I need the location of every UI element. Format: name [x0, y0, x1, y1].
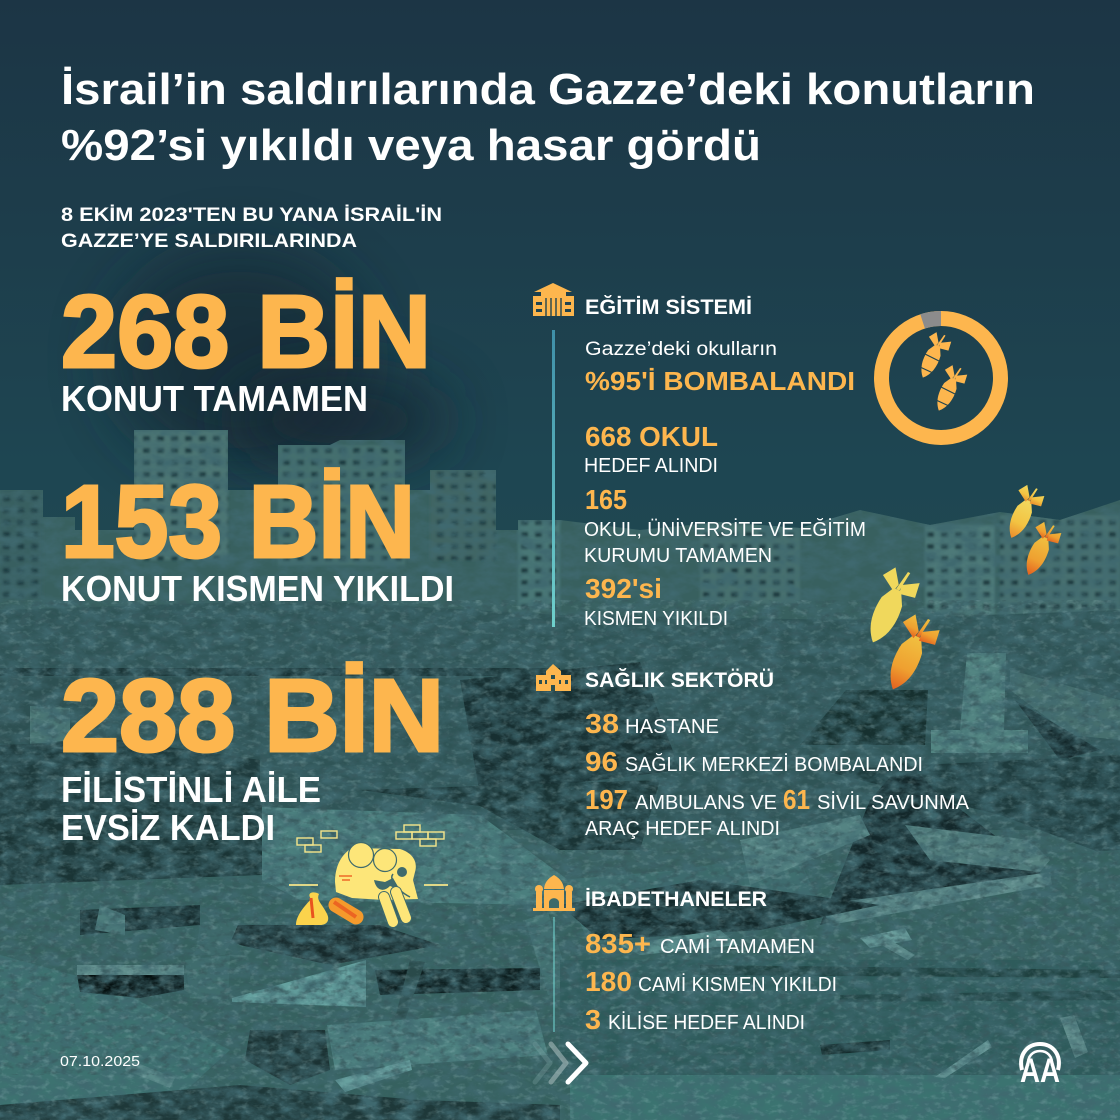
- icons: falling bombs: [855, 482, 1064, 698]
- row: 197 ambulans, 61 sivil savunma: 197: [585, 784, 628, 815]
- stat: 165: 165: [585, 484, 627, 515]
- heading: eğitim sistemi: EĞİTİM SİSTEMİ: [585, 295, 752, 319]
- icon: hospital building: [536, 664, 571, 691]
- text: kurumu tamamen: KURUMU TAMAMEN: [584, 545, 772, 567]
- left column: key figures: [61, 274, 454, 848]
- text: okul üniversite: OKUL, ÜNİVERSİTE VE EĞİTİM: [584, 518, 866, 541]
- row: 3 kilise: 3: [585, 1004, 601, 1035]
- row: 835+ cami: CAMİ TAMAMEN: [660, 935, 815, 958]
- logo: AA: [1020, 1044, 1060, 1090]
- row: 180 cami: 180: [585, 966, 632, 997]
- row: 197 ambulans, 61 sivil savunma: 61: [783, 784, 810, 815]
- subtitle: [61, 205, 442, 252]
- text: gazze'deki okulların: Gazze’deki okulların: [585, 339, 777, 360]
- logo: AA: AA: [1020, 1052, 1060, 1090]
- stat: 392'si: 392'si: [585, 573, 662, 604]
- stat: 288 bin: 288 BİN: [61, 658, 444, 773]
- row: 180 cami: CAMİ KISMEN YIKILDI: [638, 973, 837, 996]
- section: health: [536, 664, 970, 840]
- vertical rule: [552, 330, 555, 627]
- title: %92’si yıkıldı veya hasar gördü: [61, 121, 761, 170]
- ground: [0, 850, 1120, 890]
- row: 96 sağlık merkezi: SAĞLIK MERKEZİ BOMBALANDI: [625, 753, 923, 776]
- text: %95'i bombalandı: %95'İ BOMBALANDI: [585, 366, 855, 396]
- label: evsiz kaldı: EVSİZ KALDI: [61, 807, 275, 848]
- row: 835+ cami: [585, 928, 815, 959]
- row: 180 cami: [585, 966, 837, 997]
- icon: chevrons: [535, 1044, 586, 1082]
- icon: displaced family with bricks: [289, 825, 448, 925]
- section: places of worship: [533, 875, 837, 1035]
- icon: school building: [533, 283, 574, 316]
- row: 197 ambulans, 61 sivil savunma: AMBULANS VE: [635, 792, 777, 814]
- date: 07.10.2025: [60, 1054, 140, 1070]
- row: 38 hastane: HASTANE: [625, 716, 719, 738]
- subtitle: 8 EKİM 2023'TEN BU YANA İSRAİL'İN: [61, 205, 442, 226]
- label: konut kısmen yıkıldı: KONUT KISMEN YIKILDI: [61, 568, 454, 609]
- label: konut tamamen: KONUT TAMAMEN: [61, 378, 368, 419]
- row: 96 sağlık merkezi: [585, 746, 923, 777]
- row: araç hedef alındı: ARAÇ HEDEF ALINDI: [585, 818, 780, 840]
- donut chart: 95%: [882, 318, 1000, 438]
- row: 835+ cami: 835+: [585, 928, 651, 959]
- text: kısmen yıkıldı: KISMEN YIKILDI: [584, 608, 728, 630]
- stat: 268 bin: 268 BİN: [61, 274, 431, 389]
- row: 3 kilise: KİLİSE HEDEF ALINDI: [608, 1011, 805, 1034]
- row: 38 hastane: 38: [585, 708, 619, 739]
- row: 3 kilise: [585, 1004, 805, 1035]
- label: filistinli aile: FİLİSTİNLİ AİLE: [61, 769, 321, 810]
- heading: sağlık sektörü: SAĞLIK SEKTÖRÜ: [585, 668, 774, 692]
- texture: [0, 420, 1120, 1120]
- section: education: [533, 283, 1000, 630]
- stat: 153 bin: 153 BİN: [61, 464, 415, 579]
- background: sky and ruins photo: [0, 258, 1120, 1120]
- row: 96 sağlık merkezi: 96: [585, 746, 618, 777]
- row: 197 ambulans, 61 sivil savunma: SİVİL SAVUNMA: [817, 791, 970, 814]
- title: [61, 65, 1035, 170]
- icon: mosque: [533, 875, 575, 911]
- mid band: [0, 600, 1120, 830]
- heading: ibadethaneler: İBADETHANELER: [585, 888, 767, 911]
- row: 38 hastane: [585, 708, 719, 739]
- subtitle: GAZZE’YE SALDIRILARINDA: [61, 231, 357, 252]
- row: 197 ambulans, 61 sivil savunma: [585, 784, 970, 815]
- title: İsrail’in saldırılarında Gazze’deki konutların: [61, 65, 1035, 114]
- text: hedef alındı: HEDEF ALINDI: [584, 455, 718, 477]
- stat: 668 okul: 668 OKUL: [585, 421, 718, 452]
